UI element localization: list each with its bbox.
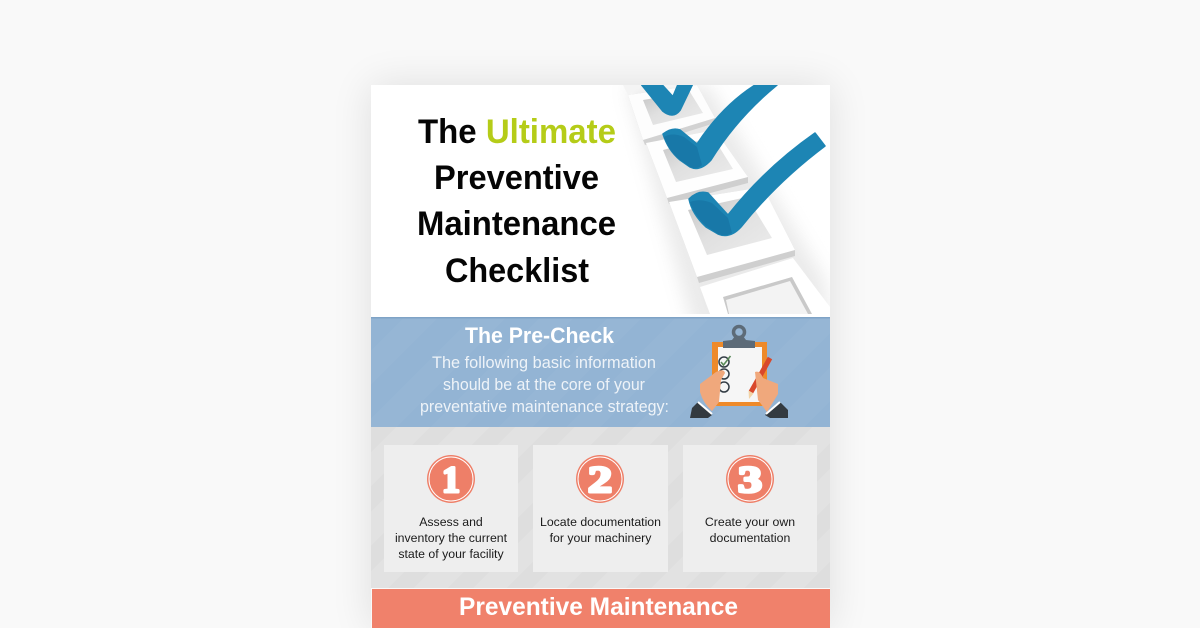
panel: the pre-check <box>371 317 830 418</box>
step 3 card: Create your own <box>705 515 795 529</box>
header panel <box>418 85 826 314</box>
panel: steps <box>384 445 817 572</box>
step 1 card: 1 <box>442 460 460 501</box>
step 3 card <box>683 445 817 572</box>
icon: middle check mark <box>663 85 777 168</box>
step 3 card: documentation <box>710 531 790 545</box>
step 1 card <box>384 445 518 572</box>
infographic card shadow <box>371 85 830 628</box>
pre-check heading: The Pre-Check <box>465 323 615 348</box>
step 2 card: Locate documentation <box>540 515 661 529</box>
title: The Ultimate <box>418 113 616 151</box>
step 2 card: for your machinery <box>550 531 652 545</box>
pre-check background band <box>371 317 830 427</box>
panel: preventive maintenance banner <box>372 589 830 628</box>
pre-check text: The following basic information <box>432 354 656 372</box>
step 1 card: Assess and <box>419 515 483 529</box>
step 1 card: inventory the current <box>395 531 508 545</box>
pre-check text <box>420 354 669 416</box>
step 1 card: state of your facility <box>398 547 504 561</box>
step 2 card: 2 <box>588 460 612 501</box>
infographic artwork <box>371 85 830 628</box>
step 3 card: 3 <box>738 460 762 501</box>
title: Checklist <box>445 252 589 290</box>
step 2 card <box>533 445 668 572</box>
panel: preventive maintenance banner: Preventive Maintenance <box>459 593 738 621</box>
icon: large check mark <box>689 133 825 235</box>
pre-check text: preventative maintenance strategy: <box>420 398 669 416</box>
title <box>417 113 616 290</box>
title: Preventive <box>434 159 599 197</box>
pre-check text: should be at the core of your <box>443 376 645 394</box>
steps background band <box>371 427 830 588</box>
icon: top check mark <box>642 85 692 115</box>
title: Maintenance <box>417 205 616 243</box>
checkbox illustration <box>623 85 830 330</box>
icon: clipboard held in hands <box>690 326 788 418</box>
